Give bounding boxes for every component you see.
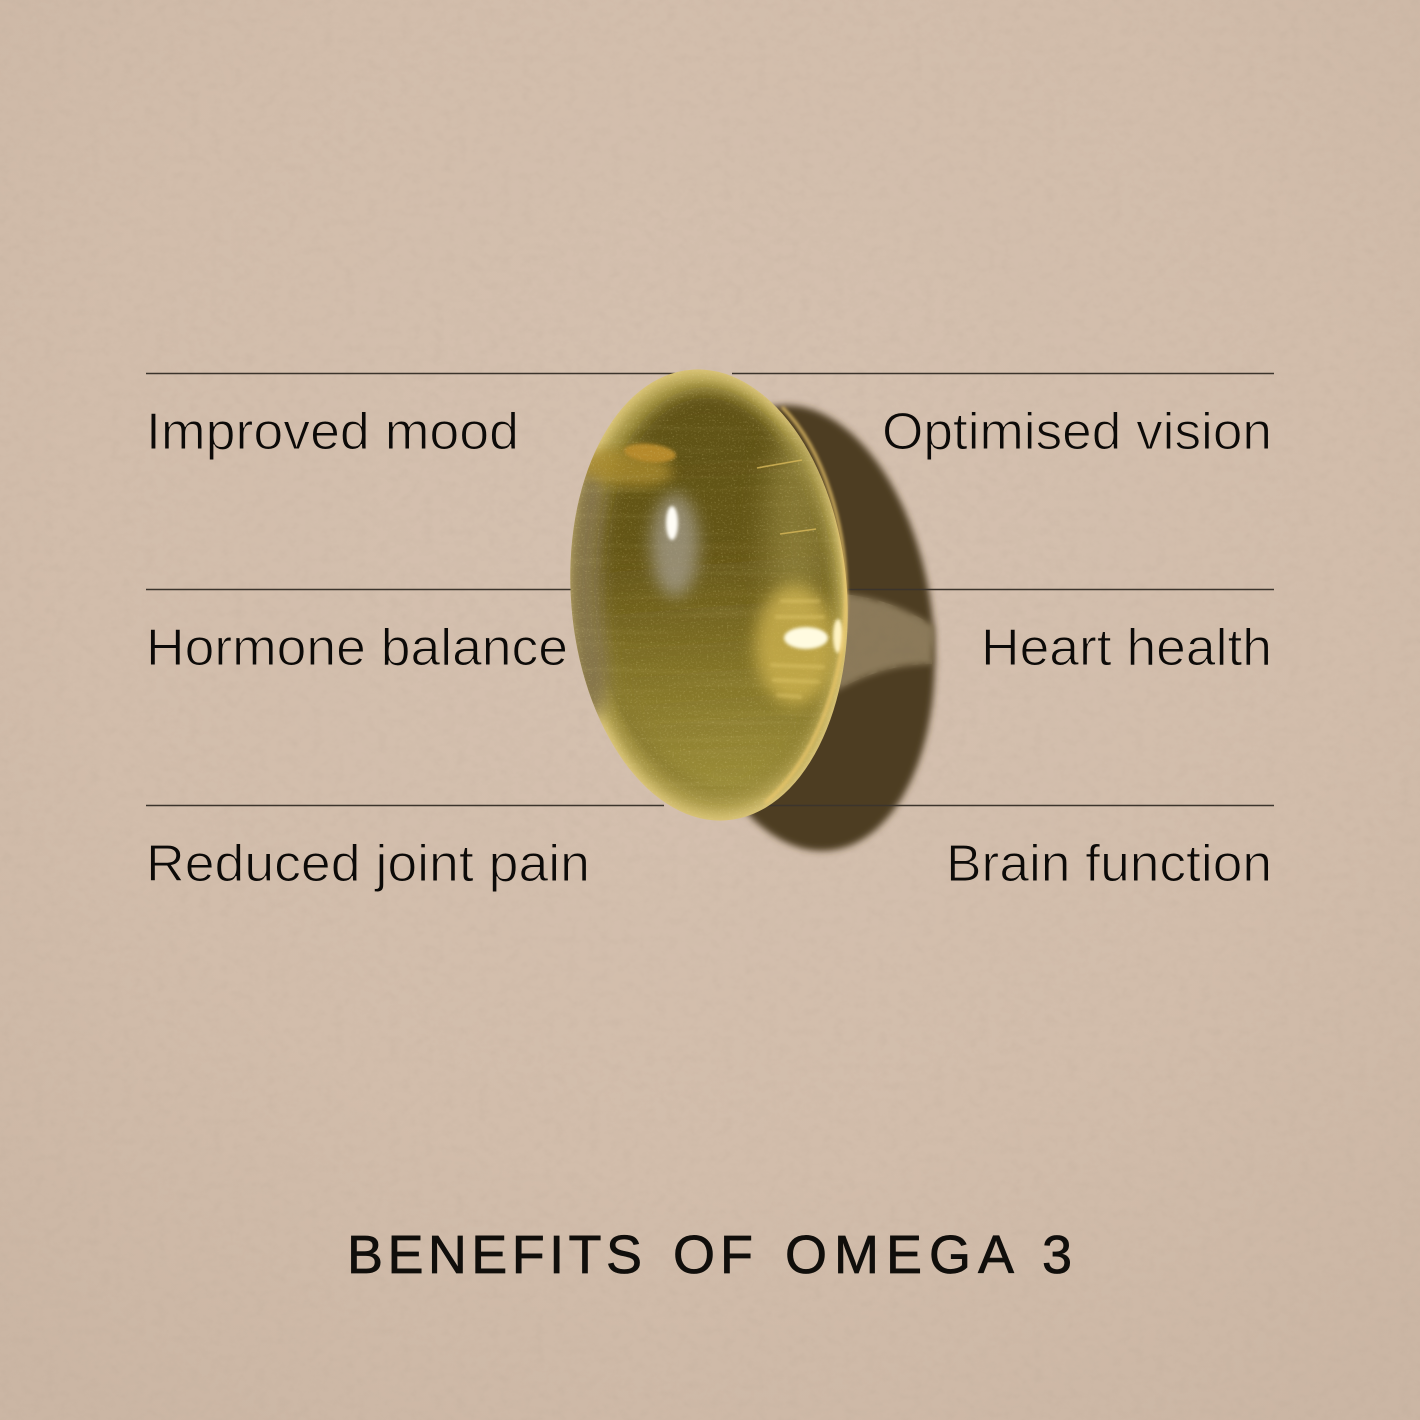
label: Heart health: Heart health bbox=[981, 619, 1272, 677]
label: Hormone balance: Hormone balance bbox=[146, 619, 568, 677]
omega 3 capsule bbox=[570, 369, 850, 821]
label: Improved mood: Improved mood bbox=[146, 403, 519, 461]
title: 3 bbox=[1042, 1225, 1072, 1285]
divider lines bbox=[146, 374, 1274, 806]
label: Optimised vision: Optimised vision bbox=[882, 403, 1272, 461]
label: Brain function: Brain function bbox=[946, 835, 1272, 893]
title bbox=[347, 1225, 1072, 1285]
label: Reduced joint pain: Reduced joint pain bbox=[146, 835, 590, 893]
title: OMEGA bbox=[785, 1225, 1014, 1285]
title: OF bbox=[673, 1225, 753, 1285]
capsule shadow bbox=[649, 390, 959, 866]
title: BENEFITS bbox=[347, 1225, 642, 1285]
infographic canvas bbox=[0, 369, 1420, 1420]
